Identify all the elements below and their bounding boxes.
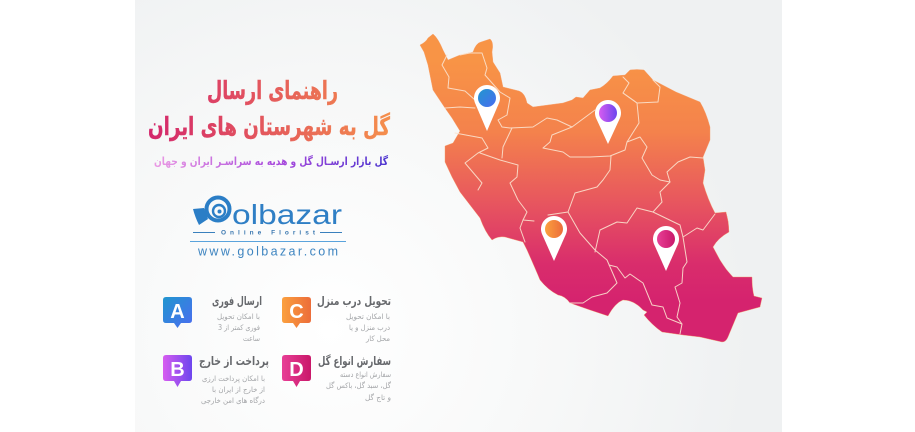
logo tagline: Online Florist xyxy=(221,230,316,236)
map of Iran xyxy=(420,34,762,342)
description: از خارج از ایران با xyxy=(212,385,265,394)
icon: logo swirl xyxy=(193,198,230,225)
website url: www.golbazar.com xyxy=(197,244,338,258)
province borders xyxy=(442,53,715,334)
description: با امکان پرداخت ارزی xyxy=(202,374,265,383)
description: با امکان تحویل xyxy=(217,312,260,321)
pin: south west, orange xyxy=(541,216,567,261)
heading: ارسال فوری xyxy=(212,294,262,309)
title: گل به شهرستان های ایران xyxy=(148,112,390,142)
description: ساعت xyxy=(243,334,260,343)
pin: north west, blue xyxy=(474,85,500,131)
icon: badge A: A xyxy=(170,301,185,323)
description: فوری کمتر از 3 xyxy=(218,323,260,332)
description: محل کار xyxy=(365,334,390,343)
description: سفارش انواع دسته xyxy=(340,370,391,379)
description: درگاه های امن خارجی xyxy=(201,396,265,405)
icon: badge C: C xyxy=(289,301,304,323)
feature B: payment from abroad xyxy=(163,354,269,405)
feature A: instant delivery xyxy=(163,294,262,343)
feature D: product variety xyxy=(282,354,391,402)
icon: badge D: D xyxy=(289,359,304,381)
description: گل، سبد گل، باکس گل xyxy=(326,381,391,390)
description xyxy=(201,374,265,405)
icon: badge B: B xyxy=(170,359,185,381)
description xyxy=(217,312,260,343)
pin: north east, purple xyxy=(595,100,621,144)
description xyxy=(326,370,391,402)
description: و تاج گل xyxy=(365,393,391,402)
map silhouette xyxy=(420,34,762,342)
title xyxy=(148,76,390,142)
title: راهنمای ارسال xyxy=(207,76,338,105)
feature C: door delivery xyxy=(282,294,391,343)
description: با امکان تحویل xyxy=(346,312,390,321)
heading: سفارش انواع گل xyxy=(318,354,391,369)
description xyxy=(346,312,390,343)
description: درب منزل و یا xyxy=(349,323,390,332)
pin: south east, pink xyxy=(653,226,679,271)
heading: تحویل درب منزل xyxy=(317,294,391,309)
background panel xyxy=(135,0,782,432)
logo wordmark: olbazar xyxy=(232,199,342,230)
logo: golbazar xyxy=(190,198,346,258)
heading: پرداخت از خارج xyxy=(199,354,269,368)
subtitle: گل بازار ارسـال گل و هدیه به سراسـر ایران و جهان xyxy=(154,155,388,168)
